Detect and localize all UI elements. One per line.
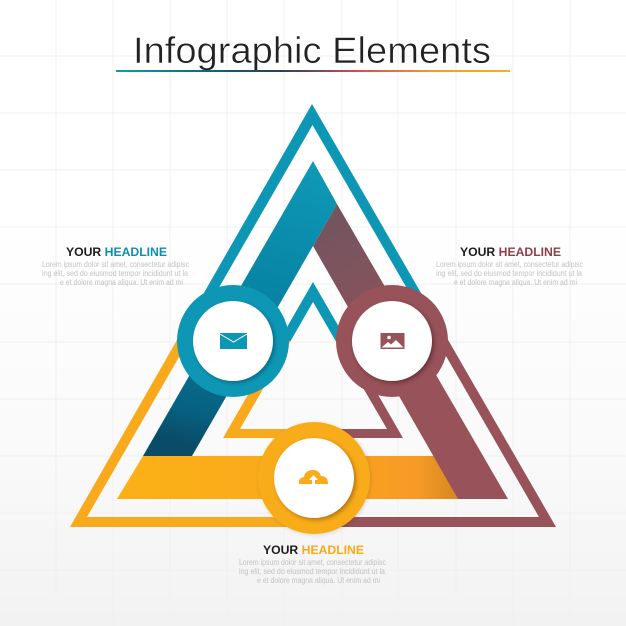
left body [42, 260, 189, 287]
bottom body: e et dolore magna aliqua. Ut enim ad mi [257, 576, 380, 585]
inner triangle outline: teal [287, 282, 338, 341]
thick band: orange [117, 456, 458, 499]
inner triangle outline: orange [223, 341, 290, 438]
node: yellow circle with cloud icon [258, 422, 371, 535]
right body [436, 260, 583, 287]
triangle diagram [70, 104, 556, 535]
left body: e et dolore magna aliqua. Ut enim ad mi [60, 278, 183, 287]
left body: Lorem ipsum dolor sit amet, consectetur adipisc [42, 260, 189, 269]
outer triangle outline: orange [70, 341, 287, 527]
left body: ing elit, sed do eiusmod tempor incididunt ut la [42, 269, 188, 278]
node: maroon circle with image icon [336, 285, 448, 397]
right body: Lorem ipsum dolor sit amet, consectetur adipisc [436, 260, 583, 269]
bottom headline: YOUR HEADLINE [263, 543, 364, 557]
bottom body: Lorem ipsum dolor sit amet, consectetur adipisc [239, 558, 386, 567]
bottom body [239, 558, 386, 585]
left headline: YOUR HEADLINE [66, 245, 167, 259]
node: teal circle with envelope icon [177, 285, 289, 397]
icon: picture [380, 333, 404, 349]
title: Infographic Elements [133, 30, 491, 71]
right headline: YOUR HEADLINE [460, 245, 561, 259]
thick band: teal [143, 161, 337, 456]
text block: left [42, 245, 189, 287]
bottom body: ing elit, sed do eiusmod tempor incididunt ut la [239, 567, 385, 576]
icon: envelope [220, 333, 247, 349]
icon: cloud upload [299, 470, 328, 484]
inner triangle outline: maroon [336, 341, 403, 438]
outer triangle outline: teal [176, 104, 449, 341]
right body: ing elit, sed do eiusmod tempor incididunt ut la [436, 269, 582, 278]
right body: e et dolore magna aliqua. Ut enim ad mi [454, 278, 577, 287]
outer triangle outline: maroon [341, 341, 556, 527]
text block: right [436, 245, 583, 287]
thick band: maroon [313, 204, 508, 499]
title underline [116, 70, 510, 72]
text block: bottom [239, 543, 386, 585]
